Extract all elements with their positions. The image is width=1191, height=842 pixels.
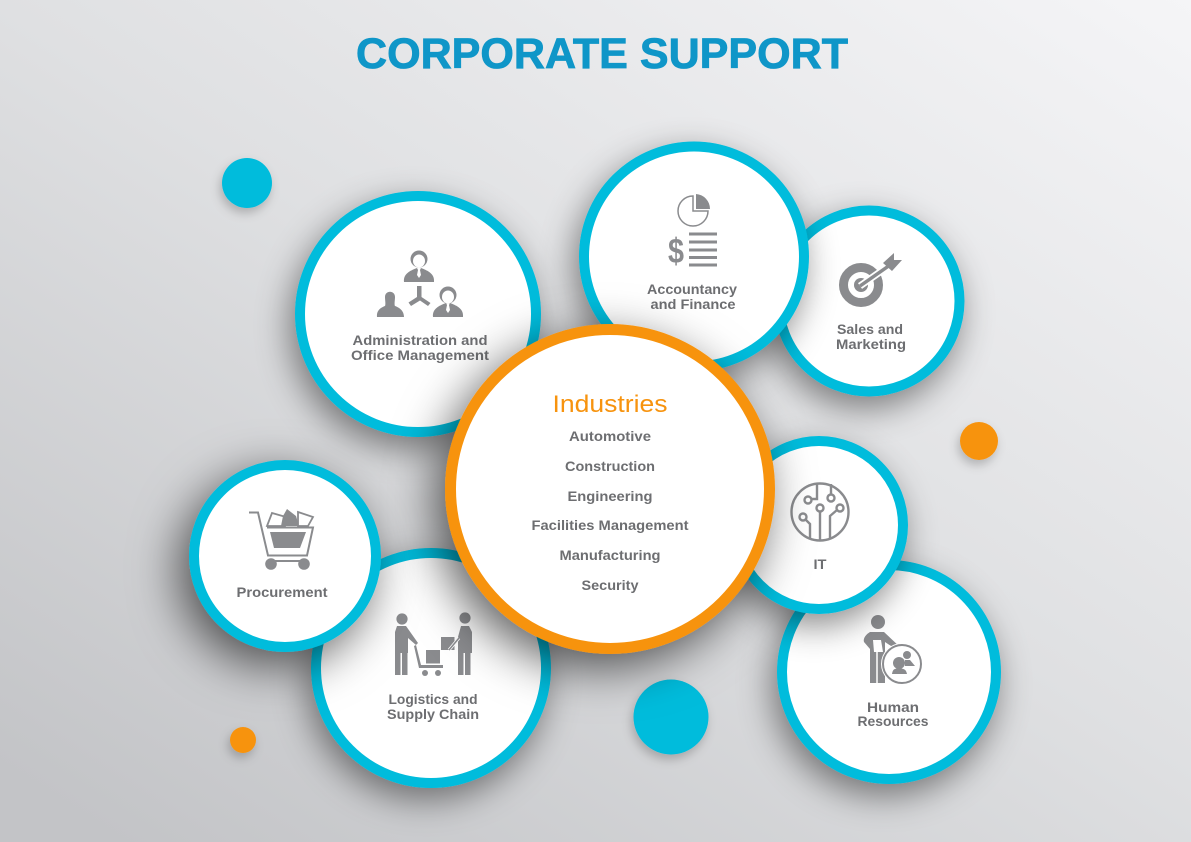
label: administration and office management: Administration and [352, 332, 488, 348]
label: accountancy and finance: Accountancy [647, 281, 737, 297]
icon: three people org [377, 250, 463, 317]
icon: circuit circle [792, 484, 848, 540]
decorative dot: teal top left [222, 158, 272, 208]
label: logistics and supply chain: Logistics and [388, 691, 478, 707]
list: industries: Security [582, 577, 639, 593]
icon: pie chart and dollar list: $ [668, 232, 684, 271]
list: industries: Automotive [569, 428, 651, 444]
label: sales and marketing [836, 321, 906, 352]
icon: two people with cart [395, 612, 472, 676]
list: industries: Facilities Management [532, 517, 689, 533]
label: sales and marketing: Sales and [837, 321, 903, 337]
panel: industries [450, 330, 770, 648]
label: administration and office management: Office Management [351, 347, 489, 363]
label: human resources: Resources [858, 713, 929, 729]
panel: logistics and supply chain [316, 553, 546, 783]
label: logistics and supply chain [387, 691, 479, 722]
panel: it [735, 441, 903, 609]
icon: target with arrow [844, 253, 902, 302]
icon: pie chart and dollar list [668, 194, 717, 271]
panel: administration and office management [300, 196, 536, 432]
label: procurement: Procurement [236, 584, 328, 600]
label: accountancy and finance [647, 281, 737, 312]
label: logistics and supply chain: Supply Chain [387, 706, 479, 722]
panel: human resources [782, 565, 996, 779]
icon: shopping cart [249, 509, 313, 570]
panel: accountancy and finance [584, 146, 804, 366]
decorative dot: teal bottom centre [634, 680, 708, 754]
label: it: IT [814, 556, 827, 572]
list: industries [532, 428, 689, 593]
list: industries: Engineering [568, 488, 652, 504]
list: industries: Manufacturing [560, 547, 660, 563]
label: human resources: Human [867, 699, 919, 715]
panel: procurement [194, 465, 376, 647]
label: accountancy and finance: and Finance [650, 296, 736, 312]
label: administration and office management [351, 332, 489, 363]
label: sales and marketing: Marketing [836, 336, 906, 352]
panel: sales and marketing [778, 210, 960, 392]
decorative dot: orange right [960, 422, 998, 460]
title: CORPORATE SUPPORT [356, 30, 848, 78]
heading: industries: Industries [552, 391, 668, 418]
label: human resources [858, 699, 929, 729]
list: industries: Construction [565, 458, 655, 474]
icon: person with people badge [864, 615, 923, 685]
decorative dot: orange bottom left [230, 727, 256, 753]
